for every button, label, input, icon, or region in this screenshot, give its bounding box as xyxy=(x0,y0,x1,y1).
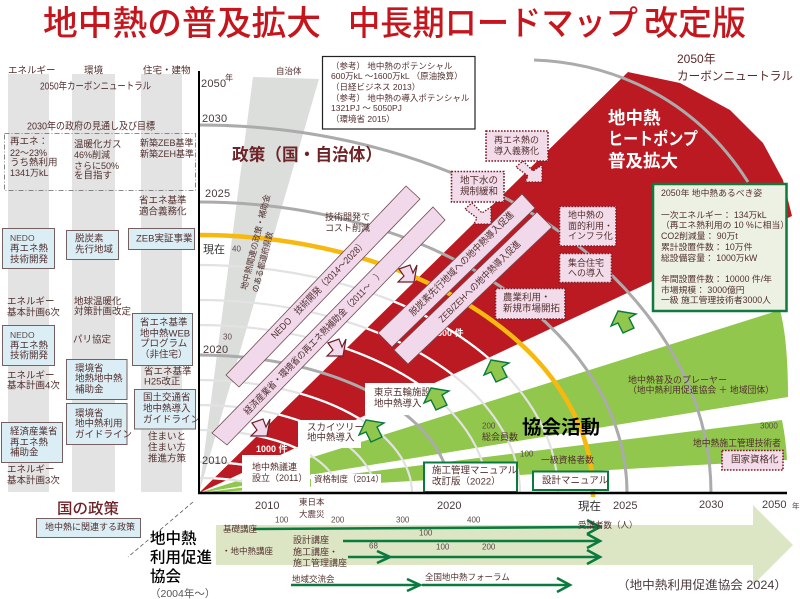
heading: 地中熱利用促進協会: 協会 xyxy=(150,568,182,586)
dotted box: 面的利用: 地中熱の xyxy=(568,209,604,220)
dotted box: 地下水の規制緩和: 地下水の xyxy=(460,174,498,186)
heading: 地中熱利用促進協会 xyxy=(150,530,215,599)
timeline: courses: 基礎講座 xyxy=(223,524,258,534)
y-axis labels: 現在 xyxy=(203,243,225,256)
box: 脱炭素先行地域 xyxy=(66,230,118,260)
box: 国土交通省: 国土交通省 xyxy=(143,392,191,404)
panel: national policy columns: 2030年の政府の見通し及び目標 xyxy=(27,120,155,132)
box: 経済産業省: 再エネ熱 xyxy=(10,436,49,448)
white box: 地中熱議連: 設立（2011） xyxy=(252,472,307,483)
box: NEDO 2: 技術開発 xyxy=(10,350,49,362)
panel: national policy columns: 住まい方 xyxy=(148,442,186,454)
timeline: courses: 100 xyxy=(419,528,433,538)
credit: （地中熱利用促進協会 2024） xyxy=(617,577,787,592)
chart: roadmap xyxy=(198,60,800,519)
panel: national policy columns: 省エネ基準 xyxy=(139,194,187,206)
dotted box: 再エネ熱の導入義務化: 再エネ熱の xyxy=(494,134,539,145)
y-axis labels: 2030 xyxy=(202,113,227,125)
x-axis labels: 大震災 xyxy=(299,509,325,519)
green wedge: players xyxy=(199,310,788,493)
panel: national policy columns: エネルギー xyxy=(7,370,55,382)
arrow: association activities timeline xyxy=(216,505,793,585)
label: 2050 carbon neutral: 2050年 xyxy=(677,52,716,66)
white box: 地中熱議連 xyxy=(242,442,310,492)
panel: 2050 vision: CO2削減量： 90万t xyxy=(661,230,738,241)
dotted box: 農業利用: 農業利用・ xyxy=(503,292,551,304)
legend box: 地中熱に関連する政策: 地中熱に関連する政策 xyxy=(45,521,135,532)
box: 参考 potential: （参考） 地中熱のポテンシャル xyxy=(331,61,453,71)
axes xyxy=(198,71,787,494)
dotted box: 集合住宅 xyxy=(560,254,612,282)
arc: 現在 xyxy=(199,235,593,497)
line: 地域交流会 xyxy=(291,579,420,591)
timeline: courses: 地域交流会 xyxy=(292,574,335,584)
y-axis labels: 年 xyxy=(225,72,233,82)
dotted box: 農業利用: 新規市場開拓 xyxy=(503,302,561,314)
timeline: courses: 200 xyxy=(482,542,496,552)
box: 参考 potential: 600万kL ～1600万kL （原油換算） xyxy=(331,71,463,81)
labels: players: （地中熱利用促進協会 ＋ 地域団体） xyxy=(628,384,774,395)
pink bar: ZEB/ZEH: ZEB/ZEHへの地中熱導入促進 xyxy=(436,238,523,325)
dotted box: 面的利用: インフラ化 xyxy=(568,231,613,241)
dotted box: 地下水の規制緩和 xyxy=(452,172,504,202)
panel: 2050 vision xyxy=(653,184,789,311)
rotated label: prefectures: 地中熱関連の政策・補助金 xyxy=(239,193,272,291)
x-axis labels: 年 xyxy=(792,500,800,510)
box: 環境省 ガイドライン: ガイドライン xyxy=(75,430,132,440)
x-axis labels: 2010 xyxy=(255,500,279,512)
2030 targets box: 温暖化ガス xyxy=(74,138,122,150)
box: 国土交通省: 地中熱導入 xyxy=(143,402,191,414)
pink bar: NEDO: NEDO 技術開発（2014～2028） xyxy=(268,238,369,341)
labels: qualifications: 200 xyxy=(482,422,496,430)
x-axis labels: 2025 xyxy=(613,500,637,512)
label: コスト削減 xyxy=(325,211,370,233)
count label: 1000件: 1000 件 xyxy=(256,443,288,454)
box: 国土交通省: ガイドライン xyxy=(143,414,200,426)
x-axis labels: 現在 xyxy=(578,500,601,513)
box: 国土交通省 xyxy=(134,390,200,429)
box: NEDO 2 xyxy=(2,326,54,366)
panel: 2050 vision: 一級 施工管理技術者3000人 xyxy=(661,294,771,305)
y-axis labels: 2020 xyxy=(203,344,228,356)
panel: national policy columns: 住宅・建物 xyxy=(143,64,191,76)
label: コスト削減: 技術開発で xyxy=(325,211,370,222)
panel: national policy columns: 環境 xyxy=(84,64,104,76)
box: 環境省 補助金: 環境省 xyxy=(75,362,104,374)
box: 環境省 補助金: 地熱地中熱 xyxy=(75,372,123,384)
white box: 地中熱議連: 地中熱議連 xyxy=(252,461,297,472)
panel: national policy columns: エネルギー xyxy=(7,464,55,476)
box: NEDO: 再エネ熱 xyxy=(10,242,49,254)
box: 施工管理マニュアル: 改訂版（2022） xyxy=(432,476,501,488)
box: 経済産業省 xyxy=(2,422,62,462)
timeline: courses: 施工管理講座 xyxy=(293,557,347,568)
box: 参考 potential: 1321PJ ～ 5050PJ xyxy=(331,103,402,113)
x-axis labels: 東日本 xyxy=(299,497,325,507)
pink bar: NEDO xyxy=(226,186,420,387)
box: 省エネ基準 地中熱WEBプログラム: （非住宅） xyxy=(140,348,188,360)
heading: 国の政策: 国の政策 xyxy=(57,500,119,518)
timeline: courses: 68 xyxy=(369,542,378,550)
white box: 東京五輪: 地中熱導入 xyxy=(374,398,422,410)
title: 改定版 xyxy=(644,5,746,43)
timeline: courses: 300 xyxy=(396,516,410,524)
arrow: pink 2 xyxy=(327,339,346,356)
arrow: pink 1 xyxy=(251,419,270,436)
x-axis labels: 2020 xyxy=(437,500,461,512)
box: 経済産業省: 補助金 xyxy=(10,446,39,458)
timeline: courses: 設計講座 xyxy=(293,534,329,545)
box: 設計マニュアル xyxy=(533,472,609,490)
labels: players xyxy=(628,374,774,395)
panel: national policy columns: エネルギー xyxy=(8,66,56,76)
panel: national policy columns: 2050年カーボンニュートラル xyxy=(40,80,151,92)
white box: スカイツリー: スカイツリー xyxy=(307,422,364,434)
dotted box: 農業利用 xyxy=(496,288,565,319)
label: 2050 carbon neutral: カーボンニュートラル xyxy=(677,69,793,83)
white box: 資格制度: 資格制度（2014） xyxy=(314,474,384,484)
y-axis labels: 40 xyxy=(232,244,241,254)
box: ZEB実証事業: ZEB実証事業 xyxy=(136,232,193,244)
dotted box: 地下水の規制緩和: 規制緩和 xyxy=(460,186,498,198)
2030 targets box: 46%削減 xyxy=(74,149,110,160)
box: 経済産業省: 経済産業省 xyxy=(10,426,58,438)
2030 targets box: 22～23% xyxy=(10,148,47,158)
panel: national policy columns: 住まいと xyxy=(148,430,186,442)
timeline: courses: 400 xyxy=(467,516,481,524)
box: NEDO xyxy=(2,228,54,268)
labels: qualifications: 一級資格者数 xyxy=(541,454,594,465)
panel: 2050 vision: 総設備容量： 1000万kW xyxy=(661,252,758,263)
title: 中長期ロードマップ xyxy=(348,5,638,43)
box: 参考 potential: （環境省 2015） xyxy=(331,114,395,124)
panel: national policy columns xyxy=(2,64,200,492)
pink bar: ZEB/ZEH xyxy=(394,212,552,364)
arrow: pink 3 xyxy=(398,265,417,282)
box: 環境省 ガイドライン: 地中熱利用 xyxy=(75,418,123,430)
labels: qualifications: 3000 xyxy=(760,422,778,430)
panel: national policy columns: 基本計画4次 xyxy=(7,380,60,392)
rotated label: prefectures: のある都道府県数 xyxy=(250,230,275,293)
dotted box: 面的利用 xyxy=(560,206,616,246)
panel: national policy columns: 対策計画改定 xyxy=(74,306,132,318)
gray wedge: 自治体 xyxy=(199,77,319,493)
dotted box: 再エネ熱の導入義務化 xyxy=(486,131,548,161)
2030 targets box: うち熱利用 xyxy=(10,156,58,168)
panel: national policy columns: パリ協定 xyxy=(73,334,112,346)
arrow: dotted to 地下水 xyxy=(465,203,491,224)
x-axis labels: 2050 xyxy=(762,499,786,511)
panel: national policy columns: 基本計画6次 xyxy=(7,306,60,318)
timeline: courses: 受講者数（人） xyxy=(578,520,638,530)
timeline: courses: 100 xyxy=(275,516,289,524)
2030 targets box: 新築ZEB基準 xyxy=(140,137,194,148)
box: ZEB実証事業 xyxy=(128,228,194,250)
timeline: courses: 施工講座・ xyxy=(293,546,338,557)
line: 基礎講座 xyxy=(253,520,600,534)
box: 参考 potential: （参考） 地中熱の導入ポテンシャル xyxy=(331,93,470,103)
labels: players: 地中熱普及のプレーヤー xyxy=(628,374,727,385)
panel: 2050 vision: 年間設置件数： 10000 件/年 xyxy=(661,273,772,284)
y-axis labels: 2050 xyxy=(201,78,226,90)
y-axis labels xyxy=(201,66,302,467)
box: NEDO: 技術開発 xyxy=(10,254,49,266)
box: 脱炭素先行地域: 先行地域 xyxy=(75,244,114,256)
line: 設計講座 xyxy=(343,534,600,548)
2030 targets box: 1341万kL xyxy=(10,168,49,178)
timeline: courses: 200 xyxy=(331,516,345,524)
panel: 2050 vision: （再エネ熱利用の 10 %に相当） xyxy=(661,219,789,230)
panel: 2050 vision: 市場規模： 3000億円 xyxy=(661,284,745,295)
panel: national policy columns: 省エネ基準 xyxy=(144,366,192,378)
timeline: courses xyxy=(222,516,638,592)
heading: 地中熱ヒートポンプ普及拡大: ヒートポンプ xyxy=(608,129,698,149)
dotted box: 国家資格化 xyxy=(722,450,783,470)
heading: 協会活動: 協会活動 xyxy=(522,416,600,438)
2030 targets box xyxy=(4,134,196,190)
count label: 500件: 500 件 xyxy=(437,327,464,338)
dotted box: 国家資格化: 国家資格化 xyxy=(731,454,779,466)
y-axis labels: 自治体 xyxy=(276,66,302,76)
white box: 資格制度 xyxy=(311,474,384,492)
box: 設計マニュアル: 設計マニュアル xyxy=(542,474,609,486)
2030 targets box: 再エネ： xyxy=(10,136,48,148)
box: 施工管理マニュアル xyxy=(424,462,518,492)
year arcs xyxy=(199,60,748,493)
title: 地中熱の普及拡大 xyxy=(43,5,321,43)
panel: 2050 vision: 一次エネルギー： 134万kL xyxy=(661,209,767,220)
2030 targets box: を目指す xyxy=(74,170,112,182)
box: NEDO 2: 再エネ熱 xyxy=(10,340,49,352)
line: 全国地中熱フォーラム xyxy=(422,578,570,592)
panel: national policy columns: H25改正 xyxy=(144,376,181,388)
heading: 地中熱利用促進協会: 地中熱 xyxy=(150,530,197,548)
pink bar: 再エネ熱補助金: 経済産業省・環境省の再エネ熱補助金（2011～ ） xyxy=(241,268,386,417)
dotted box: 集合住宅: 集合住宅 xyxy=(568,257,604,268)
box: 省エネ基準 地中熱WEBプログラム: 地中熱WEB xyxy=(140,328,190,340)
box: 環境省 ガイドライン xyxy=(66,404,132,444)
title xyxy=(43,5,746,43)
red wedge: ground source heat pump spread xyxy=(199,72,792,493)
heading: 地中熱ヒートポンプ普及拡大: 普及拡大 xyxy=(608,151,678,171)
dotted box: 面的利用: 面的利用・ xyxy=(568,220,613,231)
box: 脱炭素先行地域: 脱炭素 xyxy=(75,232,104,244)
pink bar: 再エネ熱補助金 xyxy=(212,207,445,445)
legend box: 地中熱に関連する政策 xyxy=(36,518,140,538)
y-axis labels: 2010 xyxy=(202,455,227,467)
arrow: green 4 xyxy=(611,311,636,333)
box: 省エネ基準 地中熱WEBプログラム: 省エネ基準 xyxy=(140,316,188,328)
2030 targets box: さらに50% xyxy=(74,161,119,171)
pink bar: 脱炭素先行地域 xyxy=(378,194,535,347)
x-axis labels xyxy=(255,497,800,519)
box: 参考 potential: （日経ビジネス 2013） xyxy=(331,82,420,92)
box: NEDO 2: NEDO xyxy=(10,330,35,340)
labels: qualifications: 地中熱施工管理技術者 xyxy=(693,438,781,450)
white box: スカイツリー: 地中熱導入 xyxy=(307,432,355,444)
y-axis labels: 30 xyxy=(223,332,232,342)
heading: 政策: 政策（国・自治体） xyxy=(232,144,382,164)
2030 targets box: 新築ZEH基準 xyxy=(140,148,194,159)
box: 環境省 補助金 xyxy=(66,360,127,400)
panel: national policy columns: エネルギー xyxy=(7,296,55,308)
box: 環境省 ガイドライン: 環境省 xyxy=(75,408,104,420)
box: 参考 potential xyxy=(322,56,475,129)
white box: スカイツリー xyxy=(298,420,364,448)
panel: national policy columns: 適合義務化 xyxy=(139,206,187,218)
dotted box: 再エネ熱の導入義務化: 導入義務化 xyxy=(494,145,539,156)
line: 施工講座 xyxy=(348,550,600,564)
timeline: courses: 100 xyxy=(436,542,450,552)
dotted box: 集合住宅: への導入 xyxy=(568,267,604,278)
label: 2050 carbon neutral xyxy=(677,52,793,83)
pink bar: 脱炭素先行地域: 脱炭素先行地域への地中熱導入促進 xyxy=(407,209,517,318)
labels: qualifications: 100 xyxy=(520,450,534,458)
arrow: dotted to 再エネ義務化 xyxy=(516,161,542,182)
y-axis labels: 2025 xyxy=(205,188,230,200)
labels: qualifications xyxy=(482,422,781,465)
timeline: courses: ・地中熱講座 xyxy=(222,546,274,556)
labels: qualifications: 総会員数 xyxy=(482,431,518,442)
panel: 2050 vision: 累計設置件数： 10万件 xyxy=(661,241,753,252)
green wedge: engineers xyxy=(199,420,787,493)
white box: 東京五輪: 東京五輪施設 xyxy=(374,386,432,398)
panel: national policy columns: 地球温暖化 xyxy=(74,296,122,308)
panel: national policy columns: 基本計画3次 xyxy=(7,474,60,486)
heading: 地中熱利用促進協会: 利用促進 xyxy=(150,548,212,566)
box: 省エネ基準 地中熱WEBプログラム: プログラム xyxy=(140,338,187,350)
heading: 地中熱ヒートポンプ普及拡大 xyxy=(608,108,698,171)
timeline: courses: 全国地中熱フォーラム xyxy=(425,572,510,582)
white box: 東京五輪 xyxy=(365,383,441,415)
box: NEDO: NEDO xyxy=(10,233,35,243)
dashed divider xyxy=(128,502,193,557)
box: 施工管理マニュアル: 施工管理マニュアル xyxy=(432,464,518,476)
heading: 地中熱ヒートポンプ普及拡大: 地中熱 xyxy=(608,108,661,128)
box: 省エネ基準 地中熱WEBプログラム xyxy=(132,314,192,366)
arrow: green 2 xyxy=(424,388,449,410)
label: コスト削減: コスト削減 xyxy=(325,222,370,233)
panel: national policy columns: 推進方策 xyxy=(148,452,187,464)
box: 環境省 補助金: 補助金 xyxy=(75,384,104,396)
arrow: green 1 xyxy=(359,420,384,442)
panel: 2050 vision: 2050年 地中熱あるべき姿 xyxy=(661,187,762,198)
arrow: green 3 xyxy=(484,360,509,382)
x-axis labels: 2030 xyxy=(699,499,723,511)
